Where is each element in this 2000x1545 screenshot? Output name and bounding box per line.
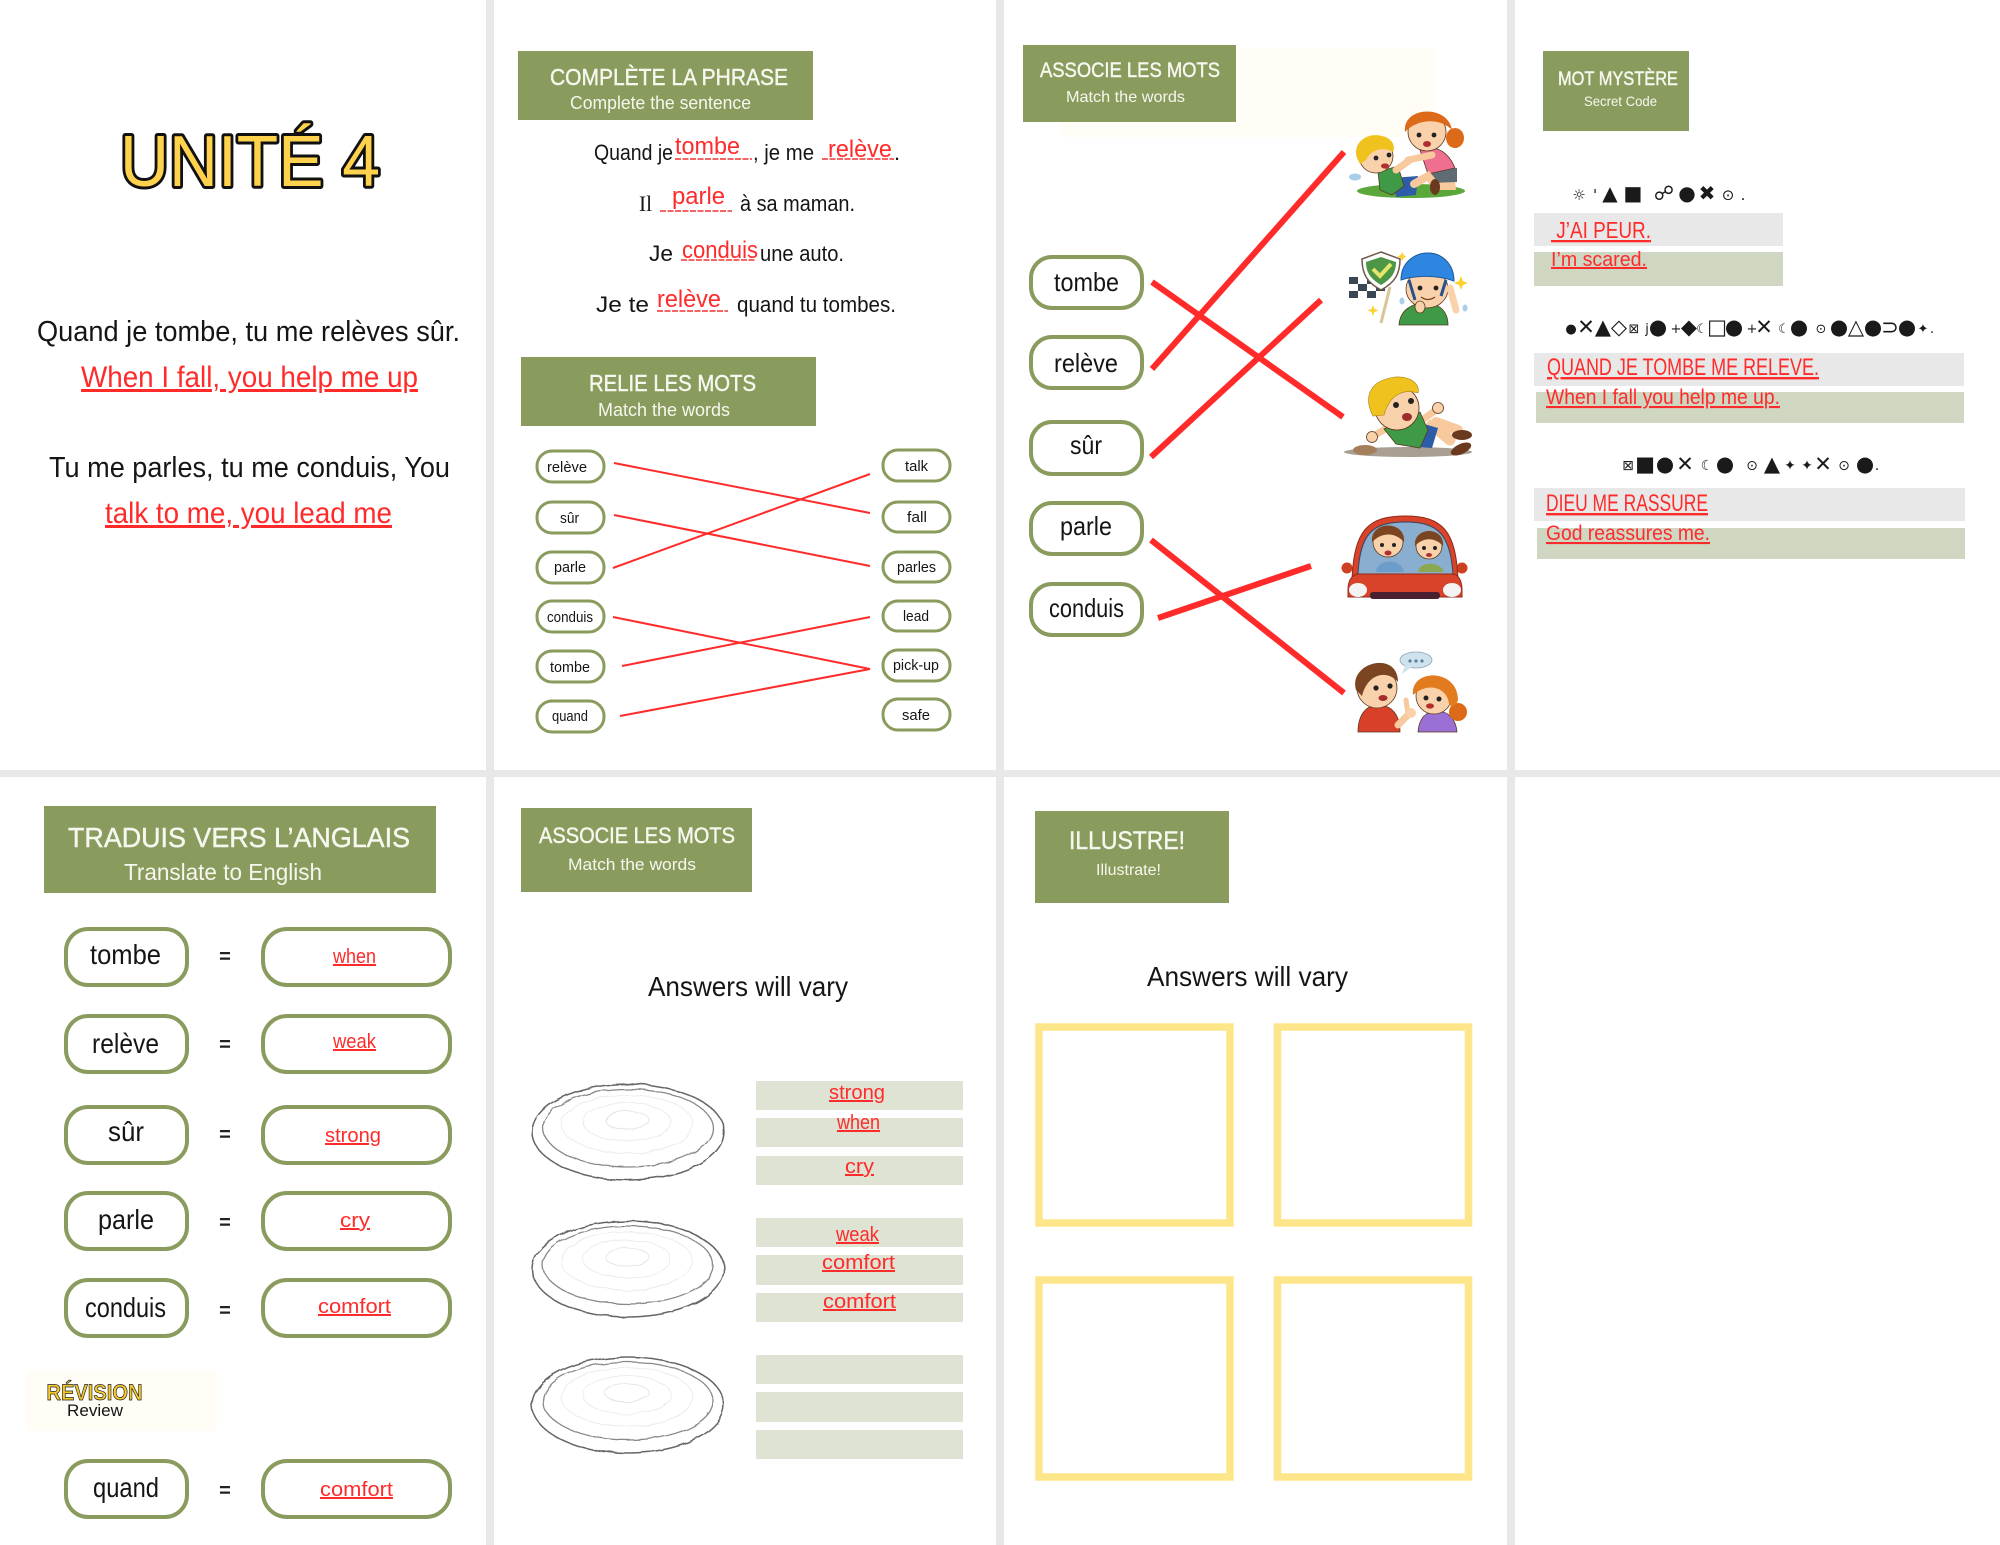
left word pills: quand (552, 708, 588, 725)
answer 1 english (1534, 249, 1783, 286)
answer bars: cry (845, 1156, 874, 1178)
english answer pills: when (332, 946, 376, 968)
equals signs: = (219, 946, 231, 968)
review label (26, 1370, 217, 1431)
lyrics: line 2: Tu me parles, tu me conduis, You (49, 452, 450, 484)
pie 1 (532, 1084, 724, 1180)
english answer pills: cry (340, 1210, 370, 1232)
heading: associe les mots: ASSOCIE LES MOTS (1040, 59, 1220, 82)
french word pills: quand (93, 1472, 159, 1503)
equals signs (219, 946, 231, 1502)
heading: mot mystère: Secret Code (1584, 93, 1657, 109)
icon: boy falling (1344, 377, 1473, 458)
word pills: parle (1060, 511, 1112, 541)
heading: mot mystère (1543, 51, 1689, 131)
code line 2: ●⊠j+☾+☾⊙✦. (1565, 322, 1934, 337)
answer lines (1151, 152, 1344, 693)
panel: secret code (1534, 51, 1965, 559)
word pills: conduis (1049, 593, 1124, 623)
left word pills: parle (554, 559, 586, 576)
answer 2 french: QUAND JE TOMBE ME RELEVE. (1547, 354, 1819, 381)
answer 1 french: J’AI PEUR. (1551, 217, 1651, 243)
panel: complete the sentence (518, 51, 900, 317)
right word pills: fall (907, 509, 927, 526)
answer bars: comfort (823, 1291, 896, 1313)
answer bars: weak (835, 1224, 880, 1246)
pie 3 (532, 1357, 724, 1453)
equals signs: = (219, 1300, 231, 1322)
review label: Review (67, 1401, 124, 1420)
code line 1: ▲■● (1602, 181, 1696, 205)
panel: cover (37, 122, 460, 530)
icon: kids in red car (1342, 516, 1468, 599)
right word pills: pick-up (893, 657, 939, 674)
review label: RÉVISION (46, 1380, 142, 1405)
heading: complète la phrase (518, 51, 813, 120)
left word pills: tombe (550, 659, 590, 676)
heading: illustre: Illustrate! (1096, 862, 1161, 879)
sentence 4: Je te (596, 292, 649, 317)
heading: illustre (1035, 811, 1229, 903)
lyrics: translation 1: When I fall, you help me up (81, 361, 418, 394)
drawing frames (1039, 1027, 1468, 1477)
heading: associe les mots: Match the words (1066, 89, 1185, 106)
sentence 4: relève (657, 286, 721, 313)
word pills (1031, 257, 1142, 635)
sentence 1 (594, 133, 900, 165)
panel: match words small (521, 357, 950, 732)
heading: illustre: ILLUSTRE! (1069, 827, 1185, 855)
word pills: sûr (1070, 430, 1102, 460)
code line 3: ⊠☾⊙✦✦⊙. (1622, 458, 1879, 474)
word pills: tombe (1054, 267, 1119, 297)
sentence 3 (649, 237, 844, 266)
english answer pills: comfort (320, 1479, 393, 1501)
left word pills: relève (547, 459, 587, 476)
answer 3 french (1534, 488, 1965, 521)
right word pills (883, 450, 950, 730)
sentence 2: Il (639, 191, 652, 216)
answer 1 french (1534, 213, 1783, 246)
french word pills: tombe (90, 939, 161, 970)
answer 2 english (1536, 386, 1964, 423)
lyrics: line 1: Quand je tombe, tu me relèves sûr. (37, 316, 460, 348)
right word pills: lead (903, 608, 929, 625)
answer bars: strong (829, 1082, 885, 1104)
french word pills: parle (98, 1204, 154, 1235)
english answer pills: weak (332, 1031, 377, 1053)
right word pills: parles (897, 559, 936, 576)
heading: traduis (44, 806, 436, 893)
code line 1: ☼'⊙. (1572, 186, 1745, 204)
equals signs: = (219, 1212, 231, 1234)
panel: match words to pictures (1023, 45, 1473, 732)
equals signs: = (219, 1034, 231, 1056)
heading: complète la phrase: Complete the sentence (570, 93, 751, 113)
code line 1: ☍✖ (1654, 181, 1715, 205)
sentence 1: . (894, 140, 900, 165)
left word pills: conduis (547, 609, 593, 626)
pie 2 (532, 1221, 724, 1317)
heading: associe les mots (521, 808, 752, 892)
sentence 1: Quand je (594, 140, 673, 165)
icon: kids talking (1355, 652, 1467, 732)
heading: relie les mots: Match the words (598, 400, 730, 420)
sentence 4: quand tu tombes. (737, 292, 896, 317)
heading: associe les mots: Match the words (568, 855, 696, 874)
code line 3: ■●✕●▲✕● (1635, 452, 1874, 476)
answer bars (756, 1081, 963, 1459)
sentence 2: parle (672, 183, 725, 210)
answer bars: when (836, 1112, 880, 1134)
sentence 2 (639, 183, 855, 216)
left word pills: sûr (560, 510, 579, 527)
word pills: relève (1054, 348, 1118, 378)
heading: relie les mots (521, 357, 816, 426)
answer 3 english (1537, 522, 1965, 559)
heading: relie les mots: RELIE LES MOTS (589, 370, 756, 396)
left word pills (537, 451, 604, 732)
sentence 3: une auto. (760, 241, 844, 266)
icon: helmet and shield (1349, 252, 1468, 325)
answer 2 english: When I fall you help me up. (1546, 386, 1780, 409)
heading: traduis: TRADUIS VERS L’ANGLAIS (68, 822, 410, 853)
icon: girl helping boy up (1349, 111, 1465, 198)
lyrics: translation 2: talk to me, you lead me (105, 497, 392, 530)
instruction: answers will vary: Answers will vary (648, 971, 848, 1002)
equals signs: = (219, 1480, 231, 1502)
sentence 1: tombe (675, 133, 740, 160)
french word pills (66, 929, 187, 1517)
instruction: answers will vary: Answers will vary (1147, 961, 1348, 992)
french word pills: conduis (85, 1292, 166, 1323)
sentence 4 (596, 286, 896, 317)
equals signs: = (219, 1124, 231, 1146)
answer 1 english: I’m scared. (1551, 249, 1647, 271)
heading: complète la phrase: COMPLÈTE LA PHRASE (550, 64, 788, 90)
english answer pills: strong (325, 1125, 381, 1147)
sentence 1: , je me (753, 140, 814, 165)
answer 2 french (1534, 353, 1964, 386)
heading: associe les mots: ASSOCIE LES MOTS (539, 823, 735, 848)
heading: mot mystère: MOT MYSTÈRE (1558, 69, 1678, 90)
french word pills: relève (92, 1028, 159, 1059)
heading: associe les mots (1023, 45, 1236, 122)
panel: illustrate (1035, 811, 1468, 1477)
answer lines (613, 463, 870, 716)
code line 2: ✕▲◇●◆□●✕●●△●⊃● (1577, 315, 1916, 339)
english answer pills (263, 929, 450, 1517)
sentence 2: à sa maman. (740, 191, 855, 216)
sentence 3: conduis (682, 237, 758, 264)
english answer pills: comfort (318, 1296, 391, 1318)
sentence 1: relève (828, 136, 892, 163)
answer bars: comfort (822, 1252, 895, 1274)
answer 3 english: God reassures me. (1546, 522, 1710, 545)
panel: translate to english (26, 806, 450, 1517)
answer 3 french: DIEU ME RASSURE (1546, 490, 1708, 517)
sentence 3: Je (649, 241, 673, 266)
right word pills: talk (905, 458, 928, 475)
right word pills: safe (902, 707, 930, 724)
heading: traduis: Translate to English (124, 859, 322, 885)
french word pills: sûr (108, 1116, 144, 1147)
panel: sort the words on pies (521, 808, 963, 1459)
title: Unité 4: UNITÉ 4 (120, 122, 380, 202)
